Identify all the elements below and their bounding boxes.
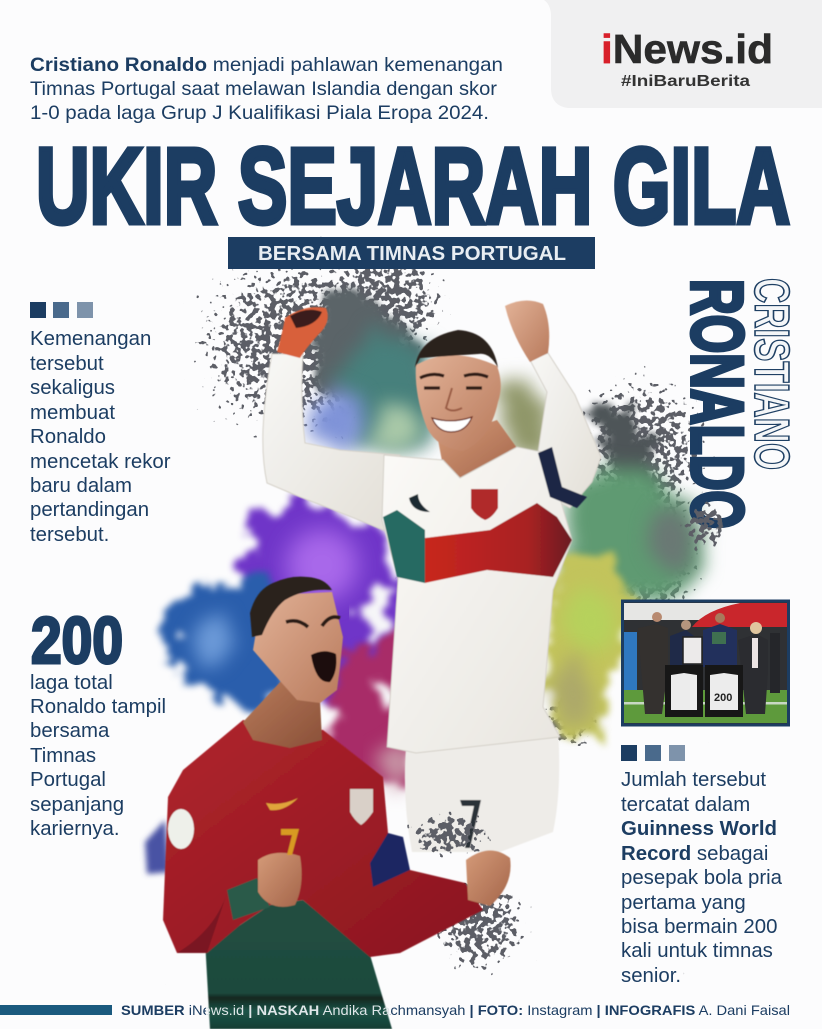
right fist — [505, 300, 549, 362]
grey dust cloud — [165, 230, 725, 985]
official second — [670, 620, 694, 667]
colour cloud: rose fade — [379, 741, 411, 789]
small blue splash — [145, 820, 170, 874]
paragraph: pesepak bola pria — [621, 867, 783, 889]
jersey number: 200 — [714, 692, 732, 704]
colour cloud: olive — [497, 375, 552, 460]
smile — [432, 417, 472, 432]
paragraph: Jumlah tersebut — [621, 769, 766, 791]
colour cloud: lime — [564, 588, 616, 652]
vertical name — [676, 278, 798, 529]
colour cloud: dark grey top — [315, 285, 425, 415]
certificate — [683, 637, 702, 664]
framed jersey right — [705, 665, 743, 717]
paragraph: Ronaldo — [30, 426, 106, 448]
pitch — [624, 690, 787, 723]
logo: iNews.id — [601, 26, 773, 90]
stat description: Portugal — [30, 769, 106, 791]
badge — [471, 489, 498, 520]
neck — [438, 420, 517, 478]
left fist — [258, 853, 302, 907]
torso jersey — [382, 447, 572, 753]
side player — [624, 632, 637, 690]
paragraph: pertandingan — [30, 499, 149, 521]
colour cloud: light blue — [192, 614, 232, 666]
badge — [350, 789, 373, 825]
paragraph: sekaligus — [30, 377, 115, 399]
logo wordmark: iNews.id — [601, 26, 773, 72]
green cuff — [227, 878, 270, 920]
paint splatter background — [145, 230, 725, 985]
pitch line — [624, 702, 787, 704]
sleeve shadow — [177, 893, 227, 953]
stat description: Timnas — [30, 745, 96, 767]
paragraph: tercatat dalam — [621, 794, 750, 816]
torso green lower — [205, 900, 392, 1029]
shorts number 7 — [460, 800, 481, 848]
footer — [0, 1002, 790, 1018]
colour cloud: magenta — [330, 635, 408, 790]
photo frame — [622, 601, 788, 725]
player: Ronaldo in white jersey, arms raised — [263, 300, 601, 852]
photo: Guinness World Record presentation — [622, 601, 788, 725]
colour cloud: teal — [335, 330, 435, 452]
neck — [243, 680, 322, 748]
stat description: bersama — [30, 720, 110, 742]
paragraph: Record sebagai — [621, 843, 768, 865]
big number: 200 — [31, 603, 123, 677]
right raised arm — [530, 353, 601, 508]
dust over shorts — [395, 805, 505, 865]
RONALDO: RONALDO — [676, 279, 757, 529]
captain armband — [538, 447, 587, 508]
euro patch — [168, 809, 194, 849]
paragraph: mencetak rekor — [30, 451, 171, 473]
paragraph: tersebut — [30, 353, 104, 375]
paragraph: kali untuk timnas — [621, 940, 773, 962]
stat description: sepanjang — [30, 794, 124, 816]
decorative squares — [30, 302, 93, 318]
intro text: 1-0 pada laga Grup J Kualifikasi Piala Eropa 2024. — [30, 102, 489, 124]
text block: Guinness record — [621, 745, 783, 987]
paragraph: Kemenangan — [30, 328, 151, 350]
nike swoosh — [266, 798, 298, 810]
subtitle banner — [228, 237, 595, 269]
open mouth — [311, 651, 336, 682]
stat description: laga total — [30, 672, 113, 694]
stat: 200 caps — [30, 603, 166, 840]
jersey red band — [425, 503, 572, 583]
paragraph: pertama yang — [621, 892, 746, 914]
referee — [770, 633, 780, 693]
intro text — [30, 54, 503, 124]
paragraph: membuat — [30, 402, 115, 424]
text block: record — [30, 302, 171, 546]
brows and eyes — [286, 617, 340, 627]
nose — [446, 388, 462, 410]
shorts — [405, 730, 559, 852]
stat description: kariernya. — [30, 818, 120, 840]
colour cloud: light purple — [286, 529, 358, 601]
paragraph: bisa bermain 200 — [621, 916, 777, 938]
intro text: Cristiano Ronaldo menjadi pahlawan kemenangan — [30, 54, 503, 76]
paragraph — [30, 328, 171, 546]
head — [253, 592, 343, 703]
hair — [415, 330, 498, 368]
panel: logo background — [544, 0, 822, 108]
decorative squares — [621, 745, 685, 761]
nike swoosh — [409, 494, 430, 512]
colour cloud: purple — [245, 500, 408, 700]
hair — [250, 577, 332, 637]
colour cloud: violet — [310, 392, 366, 448]
colour cloud: green — [565, 465, 705, 610]
head — [416, 355, 501, 451]
left raised arm — [263, 354, 400, 535]
captain armband — [370, 833, 410, 887]
torso red — [163, 720, 483, 957]
paragraph: tersebut. — [30, 524, 109, 546]
paint hole top — [363, 591, 397, 639]
left fist — [277, 307, 328, 358]
paragraph: baru dalam — [30, 475, 132, 497]
official right — [738, 622, 768, 714]
number 7 — [281, 829, 299, 855]
colour cloud: dark grey right — [590, 402, 655, 490]
colour cloud: yellow — [546, 545, 640, 745]
stat description — [30, 672, 166, 840]
dust over name end — [677, 493, 733, 557]
CRISTIANO outlined: CRISTIANO — [744, 278, 798, 470]
credits: SUMBER iNews.id | NASKAH Andika Rachmansyah | FOTO: Instagram | INFOGRAFIS A. Dani Faisal — [121, 1002, 790, 1018]
Ronaldo in photo — [703, 613, 737, 667]
framed jersey left — [665, 665, 703, 717]
paint hole bottom — [372, 682, 394, 706]
intro text: Timnas Portugal saat melawan Islandia dengan skor — [30, 78, 498, 100]
right fist — [466, 850, 511, 906]
white jersey right — [710, 673, 738, 710]
eyes and brows — [420, 374, 488, 388]
colour cloud: grey edge right — [648, 510, 696, 570]
paragraph: senior. — [621, 965, 681, 987]
colour cloud: blue — [168, 572, 280, 710]
white jersey left — [671, 673, 697, 710]
official left — [638, 612, 668, 714]
sky strip — [624, 603, 787, 620]
colour cloud: pale green — [371, 406, 419, 454]
logo tagline: #IniBaruBerita — [621, 73, 750, 90]
banner bar — [228, 237, 595, 269]
footer bar — [0, 1005, 112, 1015]
stat description: Ronaldo tampil — [30, 696, 166, 718]
paragraph: Guinness World — [621, 818, 777, 840]
red banner — [692, 603, 787, 627]
paragraph — [621, 769, 783, 987]
jersey green panel — [383, 510, 425, 583]
colour cloud: olive bottom — [552, 663, 592, 727]
banner text: BERSAMA TIMNAS PORTUGAL — [258, 242, 566, 265]
player: Ronaldo in red jersey, celebrating — [163, 577, 511, 1029]
